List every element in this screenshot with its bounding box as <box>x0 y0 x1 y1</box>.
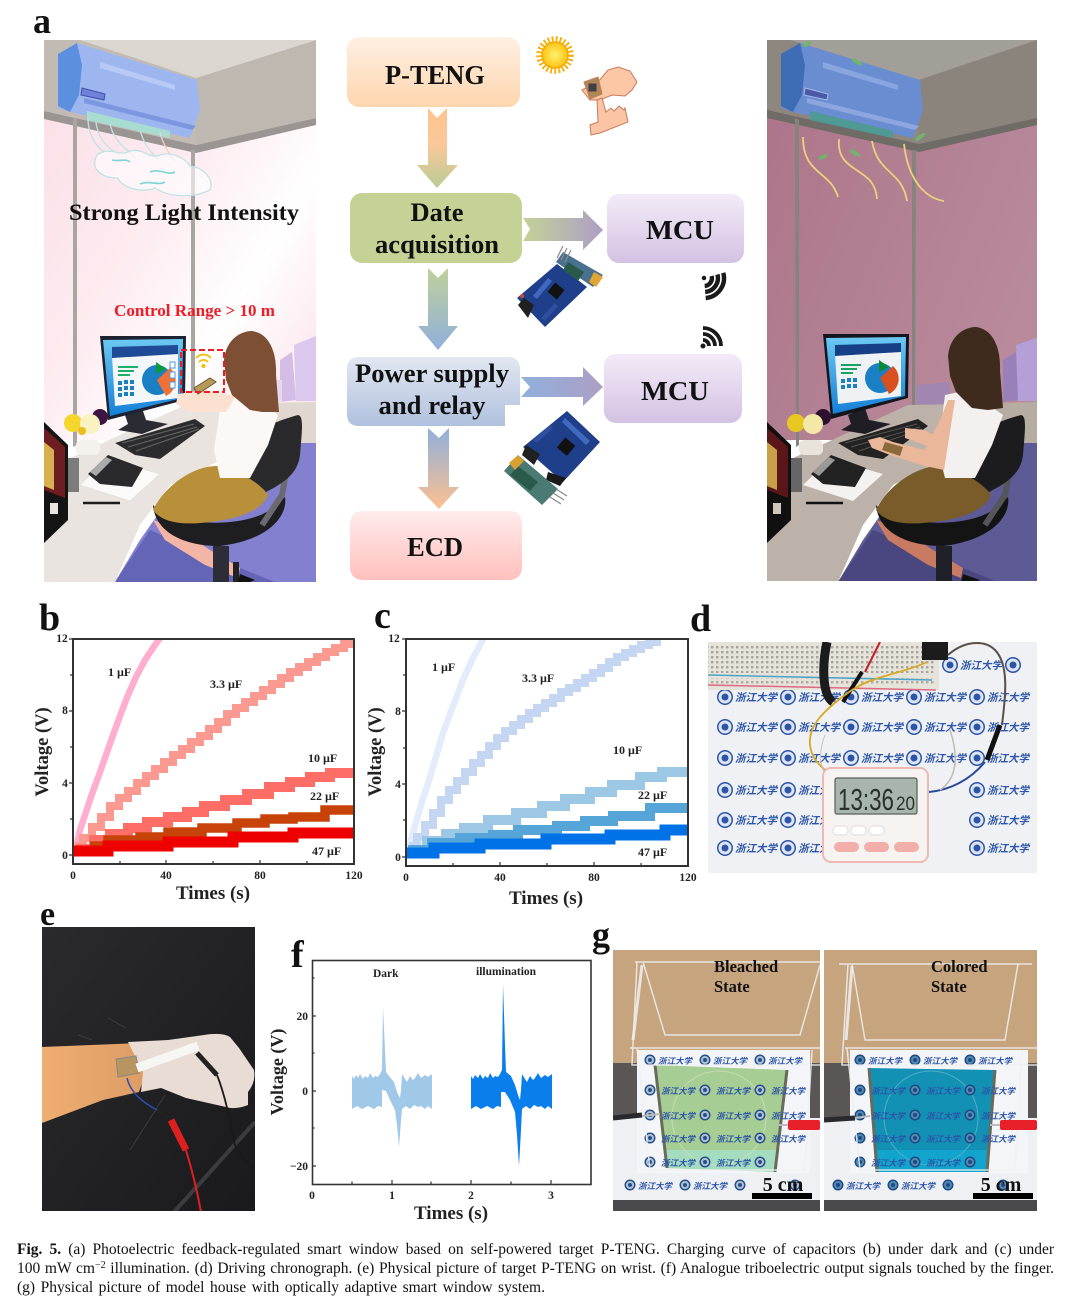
x tick labels: 3 <box>548 1190 554 1202</box>
curve labels: 3.3 µF <box>210 677 242 691</box>
logo poster <box>637 1050 810 1173</box>
tinted window <box>767 40 1037 440</box>
panel label e: e <box>40 896 55 933</box>
chair <box>153 415 302 582</box>
arrow power supply to ECD <box>418 428 459 509</box>
desk <box>44 407 220 582</box>
panel label f: f <box>291 934 305 976</box>
dark base edge <box>613 1200 820 1211</box>
university logo sheet: 浙江大学 <box>861 752 904 765</box>
axis tick labels: 0 <box>403 872 409 884</box>
heading: strong light intensity: Strong Light Intensity <box>69 200 300 225</box>
dark base edge <box>824 1200 1037 1211</box>
air flow lines <box>803 137 944 201</box>
icon: hand touching wrist sensor <box>582 67 637 135</box>
white base paper <box>613 1118 820 1211</box>
logo rows: 浙江大学 <box>981 1134 1017 1144</box>
curves <box>406 634 690 853</box>
x tick labels: 2 <box>468 1190 474 1202</box>
ceiling <box>44 40 316 153</box>
scale bar: 5 cm <box>763 1174 804 1196</box>
university logo sheet: 浙江大学 <box>987 691 1030 704</box>
desk <box>767 405 936 581</box>
remote control <box>791 458 802 492</box>
university logo sheet: 浙江大学 <box>861 784 904 797</box>
city buildings <box>916 338 1037 405</box>
axis tick labels: 12 <box>56 633 68 645</box>
document holder with books <box>767 422 791 543</box>
curve labels: 47 µF <box>312 844 341 858</box>
logo rows: 浙江大学 <box>926 1111 962 1121</box>
wall below window <box>908 402 1037 445</box>
green bleached window <box>655 1065 787 1172</box>
dark signal <box>352 1007 432 1147</box>
skirt <box>876 466 991 523</box>
colored state label: State <box>931 977 967 996</box>
box power supply and relay <box>347 357 520 426</box>
cardboard background <box>824 950 1037 1065</box>
university logo sheet: 浙江大学 <box>987 752 1030 765</box>
chronograph timer <box>823 768 928 862</box>
pen <box>83 502 120 504</box>
logo rows: 浙江大学 <box>716 1158 752 1168</box>
legs and sandals <box>876 520 980 582</box>
floor carpet <box>115 443 316 582</box>
arrow power supply to MCU <box>521 367 603 406</box>
y axis title: Voltage (V) <box>33 707 53 797</box>
box ECD <box>350 511 522 580</box>
gloved hand <box>128 1034 254 1108</box>
icon: wireless signal top <box>702 273 724 298</box>
university logo sheet: 浙江大学 <box>798 814 841 827</box>
axis tick labels: 0 <box>62 850 68 862</box>
axis tick labels: 0 <box>302 1086 308 1098</box>
logo rows: 浙江大学 <box>771 1086 807 1096</box>
arrow data acquisition to MCU <box>523 210 603 250</box>
x axis title: Times (s) <box>414 1203 488 1224</box>
logo rows: 浙江大学 <box>693 1181 729 1191</box>
window with pink glass <box>44 119 316 440</box>
figure caption <box>17 1241 1054 1296</box>
panel a centre: flowchart <box>347 37 744 580</box>
university logo sheet: 浙江大学 <box>798 752 841 765</box>
paper and desk phone <box>80 455 160 501</box>
x tick labels: 1 <box>389 1190 395 1202</box>
legs and sandals <box>153 520 255 582</box>
logo rows: 浙江大学 <box>713 1056 749 1066</box>
chart f: triboelectric output signals <box>267 960 591 1224</box>
cool air flow cloud <box>88 118 211 196</box>
university logo sheet: 浙江大学 <box>924 752 967 765</box>
wires <box>810 642 1005 792</box>
figure caption: (g) Physical picture of model house with optically adaptive smart window system. <box>17 1279 545 1296</box>
logo rows: 浙江大学 <box>871 1086 907 1096</box>
logo rows: 浙江大学 <box>768 1056 804 1066</box>
university logo sheet: 浙江大学 <box>987 721 1030 734</box>
curve labels: 22 µF <box>310 789 339 803</box>
logo poster <box>850 1050 1028 1173</box>
icon: wireless signal bottom <box>701 328 721 348</box>
university logo sheet: 浙江大学 <box>924 691 967 704</box>
signal labels <box>373 966 537 980</box>
x tick labels <box>309 1190 554 1202</box>
signal labels: Dark <box>373 968 399 980</box>
axis tick labels: 0 <box>395 852 401 864</box>
university logo sheet: 浙江大学 <box>987 784 1030 797</box>
box data acquisition: Date <box>410 198 464 227</box>
pen <box>806 502 843 504</box>
logo rows: 浙江大学 <box>871 1158 907 1168</box>
axis tick labels: 40 <box>494 872 506 884</box>
curve labels: 3.3 µF <box>522 671 554 685</box>
wires and clips <box>127 1053 255 1212</box>
arrow P-TENG to data acquisition <box>417 108 458 188</box>
university logo sheet: 浙江大学 <box>735 842 778 855</box>
box MCU top: MCU <box>646 215 714 245</box>
logo rows: 浙江大学 <box>716 1086 752 1096</box>
logo rows: 浙江大学 <box>661 1111 697 1121</box>
x tick labels: 0 <box>309 1190 315 1202</box>
box MCU bottom: MCU <box>641 376 709 406</box>
acrylic house frame <box>839 964 1037 1170</box>
keyboard <box>115 419 205 459</box>
colored state label: Colored <box>931 957 988 976</box>
axes frame and ticks <box>402 639 688 866</box>
box power supply and relay: and relay <box>378 391 486 420</box>
bleached state label: State <box>714 977 750 996</box>
signal labels: illumination <box>476 966 537 978</box>
logo rows <box>630 1056 820 1191</box>
skirt <box>153 466 268 523</box>
keyboard <box>838 419 928 459</box>
x axis title: Times (s) <box>176 883 250 904</box>
flower vase <box>787 409 831 455</box>
control range label: Control Range > 10 m <box>114 301 275 320</box>
university logo sheet: 浙江大学 <box>960 659 1003 672</box>
axes frame and ticks <box>69 639 354 864</box>
university logo sheet: 浙江大学 <box>735 814 778 827</box>
hair <box>948 327 1003 410</box>
alligator clips <box>824 1116 1037 1130</box>
panel e: photo of P-TENG on wrist <box>42 927 255 1212</box>
dark lab bench <box>613 1063 820 1123</box>
chart c: charging curves under illumination <box>366 633 697 909</box>
panel label d: d <box>690 598 711 640</box>
paper and desk phone <box>803 455 883 501</box>
window pillars <box>73 118 195 447</box>
window pillars <box>795 118 916 447</box>
panel label a: a <box>33 1 51 41</box>
axis tick labels: 8 <box>395 706 401 718</box>
university logo sheet: 浙江大学 <box>861 721 904 734</box>
panel g left: model house in bleached state <box>613 950 820 1211</box>
breadboard <box>707 642 939 690</box>
logo rows: 浙江大学 <box>871 1134 907 1144</box>
axis tick labels: 80 <box>254 870 266 882</box>
university logo sheet: 浙江大学 <box>924 721 967 734</box>
curve labels: 10 µF <box>308 751 337 765</box>
axis tick labels: 20 <box>296 1011 308 1023</box>
document holder with books <box>44 422 68 543</box>
logo rows: 浙江大学 <box>901 1181 937 1191</box>
scale bar <box>752 1174 812 1199</box>
university logo sheet: 浙江大学 <box>798 721 841 734</box>
blue colored window <box>869 1068 995 1172</box>
axis tick labels <box>56 633 363 882</box>
box MCU bottom <box>604 354 742 423</box>
logo rows: 浙江大学 <box>846 1181 882 1191</box>
university logo sheet: 浙江大学 <box>735 721 778 734</box>
box data acquisition: acquisition <box>375 230 500 259</box>
chronograph timer: 20 <box>896 794 915 815</box>
chart b: charging curves under dark <box>33 630 363 904</box>
white strip <box>137 1046 198 1068</box>
logo rows: 浙江大学 <box>716 1111 752 1121</box>
logo rows: 浙江大学 <box>658 1056 694 1066</box>
box MCU top <box>607 194 744 263</box>
air conditioner <box>58 43 200 138</box>
wall below window <box>274 402 316 443</box>
logo rows: 浙江大学 <box>926 1086 962 1096</box>
logo rows <box>838 1056 1030 1191</box>
y axis title: Voltage (V) <box>267 1029 288 1115</box>
remote control <box>68 458 79 492</box>
panel label g: g <box>592 915 610 955</box>
bleached state label: Bleached <box>714 957 778 976</box>
arrow data acquisition to power supply <box>418 268 458 350</box>
university logo sheet: 浙江大学 <box>735 691 778 704</box>
logo rows: 浙江大学 <box>978 1056 1014 1066</box>
box ECD: ECD <box>407 532 463 562</box>
computer monitor <box>823 334 909 434</box>
chair <box>876 415 1025 582</box>
logo rows: 浙江大学 <box>981 1111 1017 1121</box>
curve labels: 47 µF <box>638 845 667 859</box>
logo rows: 浙江大学 <box>981 1086 1017 1096</box>
arms on keyboard with device <box>868 400 955 470</box>
panel label b: b <box>39 597 60 639</box>
logo rows: 浙江大学 <box>771 1111 807 1121</box>
floor carpet <box>838 443 1037 582</box>
axis tick labels: 4 <box>395 779 401 791</box>
dark lab bench <box>824 1063 1037 1123</box>
box P-TENG <box>347 37 520 107</box>
figure caption: Fig. 5. (a) Photoelectric feedback-regulated smart window based on self-powered target P-TENG. Charging curve of capacitors (b) under dark and (c) under <box>17 1241 1054 1258</box>
panel a left: bright-light office scene <box>44 40 316 582</box>
logo rows: 浙江大学 <box>923 1056 959 1066</box>
distant city buildings <box>276 336 316 402</box>
curve labels: 10 µF <box>613 743 642 757</box>
logo rows: 浙江大学 <box>638 1181 674 1191</box>
university logo sheet <box>725 659 1032 855</box>
curve labels: 22 µF <box>638 788 667 802</box>
circuit board with bluetooth, top <box>517 246 603 327</box>
university logo sheet: 浙江大学 <box>798 842 841 855</box>
logo rows: 浙江大学 <box>661 1158 697 1168</box>
panel d: photo of driven chronograph <box>707 642 1037 873</box>
axes frame and ticks <box>312 960 591 1184</box>
dashed red control box <box>181 350 224 392</box>
alligator clips <box>613 1114 820 1130</box>
university logo sheet: 浙江大学 <box>861 691 904 704</box>
acrylic house frame <box>630 962 820 1170</box>
axis tick labels <box>388 633 697 884</box>
hair <box>224 331 279 412</box>
leaves <box>802 40 926 161</box>
logo rows: 浙江大学 <box>771 1134 807 1144</box>
logo rows: 浙江大学 <box>716 1134 752 1144</box>
logo rows: 浙江大学 <box>926 1134 962 1144</box>
university logo sheet: 浙江大学 <box>735 752 778 765</box>
university logo sheet: 浙江大学 <box>987 842 1030 855</box>
wireless symbol <box>196 355 211 367</box>
axis tick labels <box>290 1011 308 1173</box>
circuit board with bluetooth, bottom <box>504 411 600 505</box>
axis tick labels: 80 <box>588 872 600 884</box>
curve labels: 1 µF <box>432 660 455 674</box>
connector block <box>922 642 948 660</box>
logo rows: 浙江大学 <box>868 1056 904 1066</box>
axis tick labels: 8 <box>62 705 68 717</box>
sensor patch <box>116 1056 139 1077</box>
y axis title: Voltage (V) <box>366 707 386 797</box>
scale bar: 5 cm <box>981 1174 1022 1196</box>
curve labels <box>108 665 341 858</box>
figure caption: 100 mW cm−2 illumination. (d) Driving chronograph. (e) Physical picture of target P-TENG on wrist. (f) Analogue triboelectric output signals touched by the finger. <box>17 1260 1054 1277</box>
logo rows: 浙江大学 <box>871 1111 907 1121</box>
x axis title: Times (s) <box>509 888 583 909</box>
logo rows: 浙江大学 <box>661 1086 697 1096</box>
air conditioner <box>781 43 923 138</box>
icon: sun <box>539 39 571 71</box>
curve labels <box>432 660 667 859</box>
flower vase <box>64 409 108 455</box>
logo rows: 浙江大学 <box>661 1134 697 1144</box>
axis tick labels: 12 <box>388 633 400 645</box>
axis tick labels: 120 <box>345 870 363 882</box>
axis tick labels: −20 <box>290 1161 308 1173</box>
box power supply and relay: Power supply <box>355 359 509 388</box>
university logo sheet: 浙江大学 <box>798 691 841 704</box>
logo rows: 浙江大学 <box>926 1158 962 1168</box>
P-TENG device on wrist <box>194 378 216 394</box>
computer monitor <box>100 336 186 434</box>
forearm <box>42 1043 145 1123</box>
scale bar <box>973 1174 1033 1199</box>
axis tick labels: 0 <box>70 870 76 882</box>
panel label c: c <box>374 595 391 637</box>
curves <box>73 630 356 851</box>
shirt <box>214 404 278 478</box>
university logo sheet: 浙江大学 <box>798 784 841 797</box>
university logo sheet: 浙江大学 <box>735 784 778 797</box>
axis tick labels: 4 <box>62 778 68 790</box>
table streaks <box>78 1018 255 1212</box>
box data acquisition <box>350 193 522 263</box>
panel a right: dimmed office scene <box>767 40 1037 582</box>
university logo sheet: 浙江大学 <box>987 814 1030 827</box>
axis tick labels: 40 <box>160 870 172 882</box>
curve labels: 1 µF <box>108 665 131 679</box>
ceiling <box>767 40 1037 152</box>
shirt <box>938 390 1003 478</box>
raised arm holding P-TENG <box>176 390 236 412</box>
white base paper <box>824 1118 1037 1211</box>
illumination signal <box>471 984 552 1166</box>
axis tick labels: 120 <box>679 872 697 884</box>
cardboard background <box>613 950 820 1065</box>
chronograph timer: 13:36 <box>838 782 894 817</box>
panel g right: model house in colored state <box>824 950 1037 1211</box>
box P-TENG: P-TENG <box>385 60 485 90</box>
